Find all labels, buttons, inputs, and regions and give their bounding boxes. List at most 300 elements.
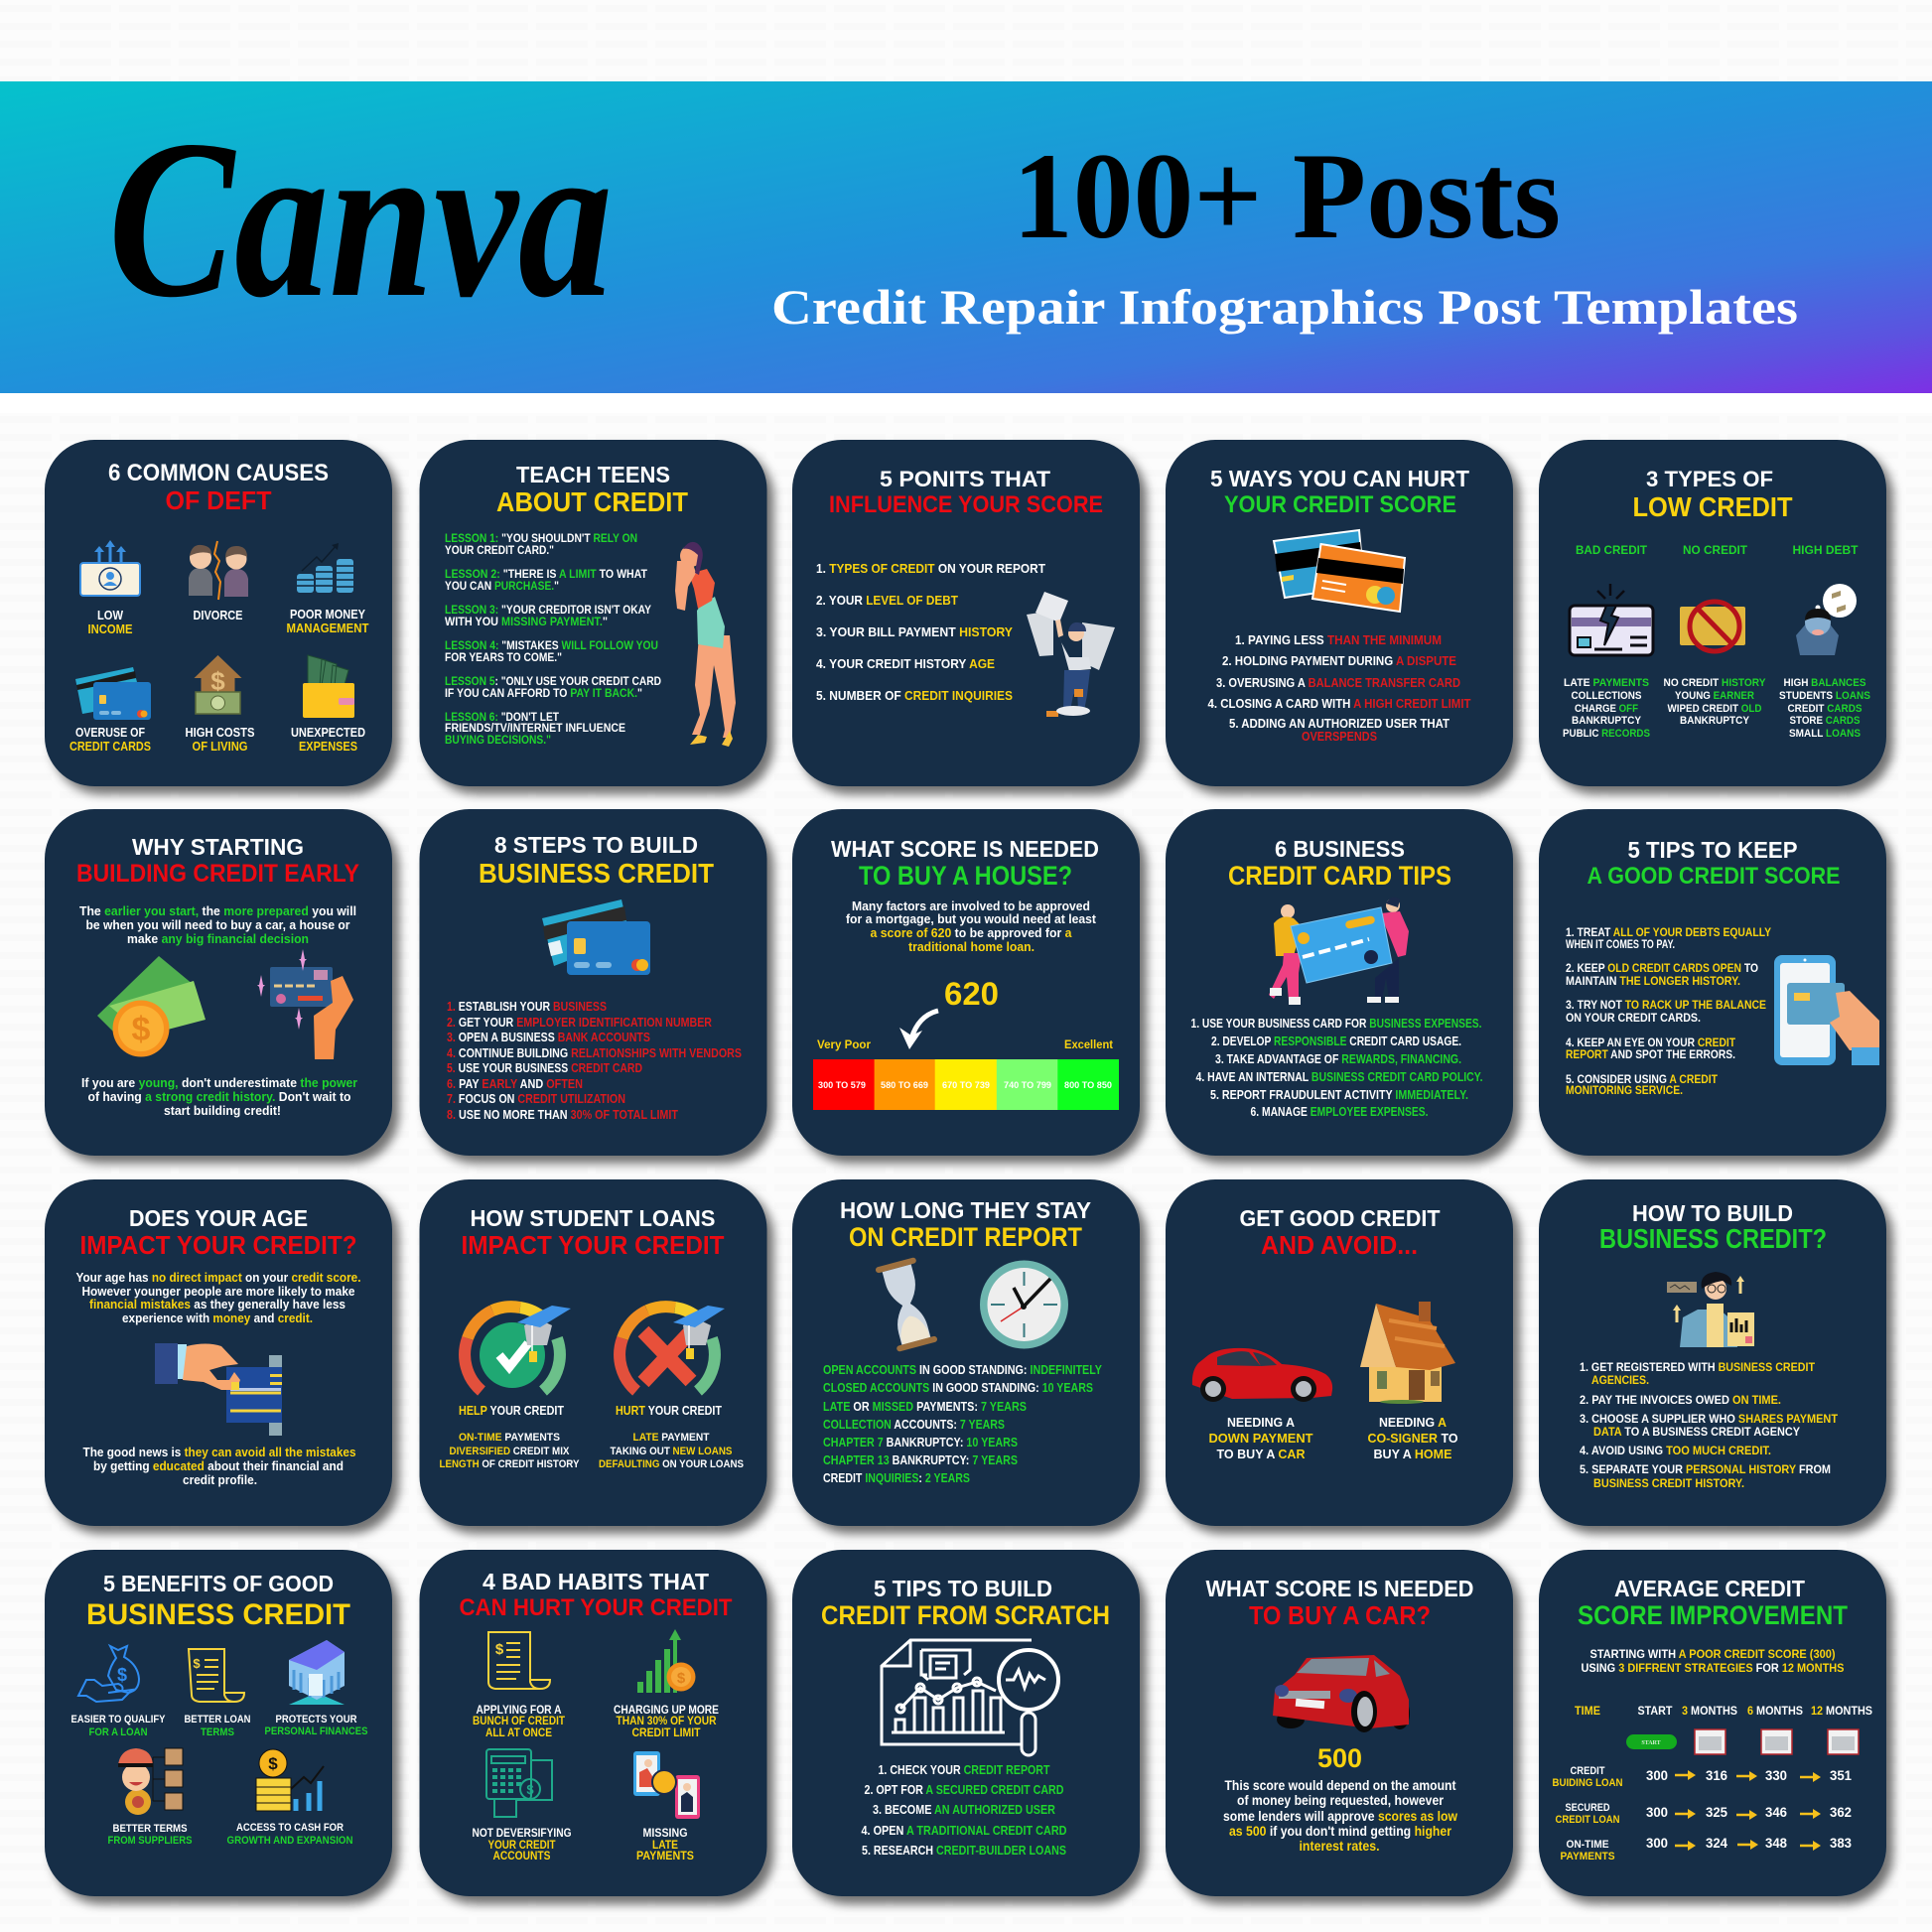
harmful habits list: OVERSPENDS <box>1302 730 1377 744</box>
icon: invoice: $ <box>495 1641 504 1658</box>
score values: 325 <box>1706 1804 1727 1820</box>
labels <box>1209 1415 1457 1461</box>
labels: NEEDING A <box>1227 1415 1296 1430</box>
labels row 2: HIGH COSTS <box>185 725 255 740</box>
closing text: credit profile. <box>183 1472 257 1487</box>
closing text <box>81 1075 357 1118</box>
heading: BUILDING CREDIT EARLY <box>76 860 359 888</box>
score values: 348 <box>1765 1835 1787 1851</box>
lessons text: FOR YEARS TO COME." <box>445 650 562 664</box>
heading <box>459 1569 733 1621</box>
description: as 500 if you don't mind getting higher <box>1229 1824 1452 1839</box>
heading <box>829 467 1103 518</box>
steps list: 1. GET REGISTERED WITH BUSINESS CREDIT <box>1580 1362 1815 1374</box>
column headers: BAD CREDIT <box>1576 543 1648 557</box>
lessons text: BUYING DECISIONS." <box>445 733 551 747</box>
description: This score would depend on the amount <box>1225 1778 1456 1793</box>
labels row 1: ALL AT ONCE <box>485 1727 552 1739</box>
illustration: worried woman <box>675 542 736 747</box>
icon: money bag in hand: $ <box>117 1665 127 1685</box>
scale labels: Excellent <box>1064 1037 1113 1051</box>
heading: HOW STUDENT LOANS <box>471 1205 715 1231</box>
panel: how long they stay on credit report <box>792 1179 1140 1526</box>
heading <box>479 832 714 889</box>
icon: rising chart with coin: $ <box>677 1670 686 1687</box>
heading <box>1587 837 1841 890</box>
steps list <box>447 1000 742 1122</box>
heading: 5 TIPS TO KEEP <box>1628 837 1797 863</box>
labels <box>459 1403 722 1418</box>
harmful habits list: 2. HOLDING PAYMENT DURING A DISPUTE <box>1222 654 1456 668</box>
table headers: TIME <box>1575 1706 1600 1718</box>
chart: credit score scale: 670 TO 739 <box>942 1080 990 1091</box>
factor lists: TAKING OUT NEW LOANS <box>610 1446 733 1457</box>
labels row 2 <box>69 725 365 754</box>
steps list: 6. PAY EARLY AND OFTEN <box>447 1077 583 1091</box>
illustration: man with papers <box>1027 592 1115 717</box>
heading: WHAT SCORE IS NEEDED <box>1205 1576 1473 1601</box>
table headers: 12 MONTHS <box>1811 1706 1872 1718</box>
heading: WHAT SCORE IS NEEDED <box>831 836 1099 862</box>
icon: overuse of credit cards <box>75 667 151 720</box>
lessons text: LESSON 5: "ONLY USE YOUR CREDIT CARD <box>445 674 661 688</box>
score values: 330 <box>1765 1767 1787 1783</box>
column lists <box>1563 677 1870 740</box>
labels row 2: NOT DEVERSIFYING <box>473 1828 572 1840</box>
description: However younger people are more likely to make <box>81 1284 355 1299</box>
heading <box>1228 836 1451 891</box>
heading <box>1239 1205 1440 1260</box>
heading: 6 COMMON CAUSES <box>108 460 329 486</box>
steps list: 4. CONTINUE BUILDING RELATIONSHIPS WITH VENDORS <box>447 1046 742 1060</box>
score factors list: 5. NUMBER OF CREDIT INQUIRIES <box>816 688 1013 703</box>
icon: calculator and documents: $ <box>526 1782 534 1797</box>
banner title: 100+ Posts <box>1013 128 1561 264</box>
panel: 5 tips to keep a good credit score <box>1539 809 1886 1156</box>
harmful habits list: 5. ADDING AN AUTHORIZED USER THAT <box>1229 717 1449 731</box>
steps list: 5. USE YOUR BUSINESS CREDIT CARD <box>447 1061 642 1075</box>
icon: low income <box>80 540 140 596</box>
tips list: 3. BECOME AN AUTHORIZED USER <box>873 1803 1055 1817</box>
heading: ABOUT CREDIT <box>496 486 688 517</box>
labels row 1: MANAGEMENT <box>286 621 369 635</box>
icon: money bag in hand <box>78 1646 139 1702</box>
factor lists: ON-TIME PAYMENTS <box>459 1432 560 1444</box>
score values: 316 <box>1706 1767 1727 1783</box>
labels: BUY A HOME <box>1374 1447 1452 1461</box>
tips list: 4. OPEN A TRADITIONAL CREDIT CARD <box>862 1824 1066 1838</box>
panel: 6 business credit card tips <box>1166 809 1513 1156</box>
lessons text: YOU CAN PURCHASE." <box>445 579 559 593</box>
heading <box>461 1205 725 1260</box>
panel: 5 points that influence your score <box>792 440 1140 786</box>
labels row 1: CHARGING UP MORE <box>614 1705 719 1717</box>
labels row 2: EXPENSES <box>299 739 357 754</box>
labels row 2: CREDIT CARDS <box>69 739 151 754</box>
icon: stressed person <box>1796 584 1857 655</box>
intro text: STARTING WITH A POOR CREDIT SCORE (300) <box>1590 1649 1836 1661</box>
icon: phones with coin <box>633 1751 700 1819</box>
lessons text: LESSON 3: "YOUR CREDITOR ISN'T OKAY <box>445 603 651 617</box>
icon: supplier worker <box>118 1748 183 1815</box>
row labels: CREDIT <box>1571 1765 1605 1777</box>
column headers: HIGH DEBT <box>1793 543 1859 557</box>
harmful habits list: 3. OVERUSING A BALANCE TRANSFER CARD <box>1216 676 1460 690</box>
panel: 6 common causes of debt <box>45 440 392 786</box>
labels row 2: LATE <box>652 1840 678 1852</box>
icon: bank <box>289 1640 345 1705</box>
heading <box>821 1576 1110 1630</box>
tips list: 1. TREAT ALL OF YOUR DEBTS EQUALLY <box>1566 927 1771 939</box>
heading: IMPACT YOUR CREDIT? <box>79 1230 357 1260</box>
chart: credit score scale: 740 TO 799 <box>1004 1080 1051 1091</box>
icon: invoice <box>189 1649 244 1702</box>
column headers: NO CREDIT <box>1683 543 1748 557</box>
tips list: 4. HAVE AN INTERNAL BUSINESS CREDIT CARD POLICY. <box>1195 1069 1483 1084</box>
column lists: BANKRUPTCY <box>1572 715 1642 727</box>
description: a score of 620 to be approved for a <box>870 925 1072 940</box>
icon: credit cards <box>1274 530 1405 612</box>
heading <box>108 460 329 515</box>
tips list: 5. RESEARCH CREDIT-BUILDER LOANS <box>862 1844 1066 1858</box>
description: for a mortgage, but you would need at least <box>846 911 1097 926</box>
logo: Canva: Canva <box>108 94 613 345</box>
labels row 1: PROTECTS YOUR <box>276 1714 357 1725</box>
icon: invoice: $ <box>193 1656 201 1671</box>
labels: CO-SIGNER TO <box>1368 1431 1457 1446</box>
description: financial mistakes as they generally have less <box>89 1297 345 1311</box>
heading: CREDIT CARD TIPS <box>1228 861 1451 891</box>
labels: HURT YOUR CREDIT <box>616 1403 722 1418</box>
score values <box>1646 1767 1852 1851</box>
score values: 300 <box>1646 1835 1668 1851</box>
heading <box>79 1205 357 1260</box>
labels row 1: CREDIT LIMIT <box>631 1727 701 1739</box>
score values: 362 <box>1830 1804 1852 1820</box>
icon: red car front view <box>1273 1655 1410 1732</box>
panel: get good credit and avoid <box>1166 1179 1513 1526</box>
description: interest rates. <box>1299 1839 1380 1854</box>
illustration: people holding card <box>1269 897 1409 1005</box>
labels row 1: TERMS <box>201 1726 234 1738</box>
lessons text: LESSON 6: "DON'T LET <box>445 710 560 724</box>
closing text <box>83 1445 355 1487</box>
tips list <box>1191 1016 1483 1119</box>
steps list: 5. SEPARATE YOUR PERSONAL HISTORY FROM <box>1580 1464 1831 1476</box>
heading: INFLUENCE YOUR SCORE <box>829 491 1103 518</box>
table headers: 3 MONTHS <box>1682 1706 1737 1718</box>
labels row 1: POOR MONEY <box>290 607 365 621</box>
score values: 300 <box>1646 1767 1668 1783</box>
tips list: 2. KEEP OLD CREDIT CARDS OPEN TO <box>1566 963 1758 975</box>
icon: cash and growth <box>256 1749 324 1811</box>
labels row 2: BETTER TERMS <box>113 1823 187 1835</box>
labels row 2: ACCOUNTS <box>492 1851 551 1863</box>
score factors list: 2. YOUR LEVEL OF DEBT <box>816 593 958 608</box>
description <box>1223 1778 1457 1854</box>
tips list: 5. CONSIDER USING A CREDIT <box>1566 1074 1718 1086</box>
arrow <box>899 1011 938 1049</box>
score values: 324 <box>1706 1835 1727 1851</box>
chart: credit score scale: 300 TO 579 <box>818 1080 866 1091</box>
labels row 1: APPLYING FOR A <box>477 1705 562 1717</box>
heading: HOW TO BUILD <box>1632 1200 1793 1226</box>
column lists: PUBLIC RECORDS <box>1563 728 1650 740</box>
labels row 1 <box>71 1714 367 1738</box>
heading: DOES YOUR AGE <box>129 1205 308 1231</box>
column lists: STUDENTS LOANS <box>1779 690 1870 702</box>
labels: HELP YOUR CREDIT <box>459 1403 564 1418</box>
steps list: AGENCIES. <box>1591 1375 1649 1387</box>
durations list: CHAPTER 7 BANKRUPTCY: 10 YEARS <box>823 1436 1018 1449</box>
description: Your age has no direct impact on your credit score. <box>75 1270 361 1285</box>
icon: high cost of living <box>195 655 242 714</box>
panel: why starting building credit early <box>45 809 392 1156</box>
intro text: USING 3 DIFFRENT STRATEGIES FOR 12 MONTHS <box>1581 1663 1845 1675</box>
durations list: LATE OR MISSED PAYMENTS: 7 YEARS <box>823 1400 1027 1414</box>
score values: 300 <box>1646 1804 1668 1820</box>
icons: calendars <box>1695 1729 1859 1754</box>
panel: score needed to buy a car <box>1166 1550 1513 1896</box>
heading: WHY STARTING <box>132 834 304 860</box>
closing text: The good news is they can avoid all the mistakes <box>83 1445 355 1459</box>
heading <box>840 1197 1091 1252</box>
score values: 346 <box>1765 1804 1787 1820</box>
column lists: STORE CARDS <box>1789 715 1861 727</box>
banner subtitle: Credit Repair Infographics Post Templates <box>771 279 1798 335</box>
closing text: If you are young, don't underestimate the power <box>81 1075 357 1090</box>
description <box>846 898 1097 954</box>
score value: 620 <box>944 976 999 1012</box>
heading: TO BUY A CAR? <box>1249 1600 1431 1630</box>
heading: SCORE IMPROVEMENT <box>1578 1600 1848 1630</box>
lessons text: FRIENDS/TV/INTERNET INFLUENCE <box>445 721 625 735</box>
steps list: 2. GET YOUR EMPLOYER IDENTIFICATION NUMBER <box>447 1016 712 1030</box>
score values: 351 <box>1830 1767 1852 1783</box>
icon: divorce <box>189 541 248 600</box>
icon: red car <box>1192 1348 1332 1402</box>
heading <box>86 1571 350 1631</box>
heading <box>1205 1576 1473 1630</box>
icon: money and coin: $ <box>132 1011 151 1048</box>
factor lists: LATE PAYMENT <box>633 1432 710 1444</box>
description: of money being requested, however <box>1237 1793 1445 1808</box>
labels row 1: EASIER TO QUALIFY <box>71 1714 166 1725</box>
heading: A GOOD CREDIT SCORE <box>1587 863 1841 890</box>
icon: money and coin <box>97 956 206 1056</box>
description <box>75 1270 361 1325</box>
row labels: CREDIT LOAN <box>1555 1814 1620 1826</box>
icon: report with magnifier <box>882 1640 1058 1755</box>
score factors list <box>816 561 1045 703</box>
heading: CAN HURT YOUR CREDIT <box>459 1594 733 1621</box>
labels row 2: PAYMENTS <box>636 1851 694 1863</box>
harmful habits list: 4. CLOSING A CARD WITH A HIGH CREDIT LIMIT <box>1207 697 1471 711</box>
labels: NEEDING A <box>1379 1415 1448 1430</box>
heading: 3 TYPES OF <box>1646 467 1773 491</box>
icon: hand holding card <box>257 949 353 1059</box>
scale labels <box>817 1037 1113 1051</box>
labels row 2: YOUR CREDIT <box>488 1840 556 1852</box>
icon: house <box>1360 1302 1455 1404</box>
start button <box>1626 1734 1677 1749</box>
labels row 2: ACCESS TO CASH FOR <box>236 1822 344 1834</box>
steps list: 4. AVOID USING TOO MUCH CREDIT. <box>1580 1446 1771 1457</box>
row labels <box>1553 1765 1623 1863</box>
icon: high cost of living: $ <box>210 666 225 696</box>
panel: how to build business credit <box>1539 1179 1886 1526</box>
column lists: YOUNG EARNER <box>1675 690 1754 702</box>
labels row 2: GROWTH AND EXPANSION <box>226 1835 353 1847</box>
heading <box>496 462 688 517</box>
heading: 5 WAYS YOU CAN HURT <box>1210 466 1469 491</box>
column lists: COLLECTIONS <box>1571 690 1642 702</box>
panel: how student loans impact your credit <box>419 1179 766 1526</box>
panel: average credit score improvement <box>1539 1550 1886 1896</box>
row labels: BUIDING LOAN <box>1553 1777 1623 1789</box>
labels row 1: PERSONAL FINANCES <box>264 1725 367 1737</box>
tips list: ON YOUR CREDIT CARDS. <box>1566 1013 1701 1025</box>
banner <box>0 81 1932 393</box>
heading: BUSINESS CREDIT? <box>1599 1223 1827 1254</box>
icon: cash and growth: $ <box>268 1754 278 1773</box>
heading: 4 BAD HABITS THAT <box>483 1569 709 1594</box>
tips list: 1. USE YOUR BUSINESS CARD FOR BUSINESS EXPENSES. <box>1191 1016 1481 1031</box>
labels row 1: INCOME <box>87 621 133 636</box>
intro text: make any big financial decision <box>127 931 309 946</box>
tips list: 2. OPT FOR A SECURED CREDIT CARD <box>864 1783 1064 1797</box>
column lists: CHARGE OFF <box>1575 703 1638 715</box>
durations list: COLLECTION ACCOUNTS: 7 YEARS <box>823 1418 1005 1432</box>
tips list: 5. REPORT FRAUDULENT ACTIVITY IMMEDIATELY. <box>1210 1087 1468 1102</box>
panel: teach teens about credit <box>419 440 766 786</box>
table headers <box>1575 1706 1872 1718</box>
heading: 6 BUSINESS <box>1275 836 1405 862</box>
lessons text: WITH YOU MISSING PAYMENT." <box>445 615 608 628</box>
tips list <box>1566 927 1771 1097</box>
column lists: LATE PAYMENTS <box>1564 677 1649 689</box>
column lists: HIGH BALANCES <box>1783 677 1866 689</box>
panel: 5 tips to build credit from scratch <box>792 1550 1140 1896</box>
labels row 1 <box>473 1705 719 1739</box>
heading: 5 TIPS TO BUILD <box>874 1576 1052 1601</box>
heading: TO BUY A HOUSE? <box>859 861 1072 891</box>
tips list: 2. DEVELOP RESPONSIBLE CREDIT CARD USAGE. <box>1211 1034 1461 1048</box>
row labels: ON-TIME <box>1567 1839 1608 1851</box>
arrows <box>1675 1770 1821 1851</box>
tips list: WHEN IT COMES TO PAY. <box>1566 939 1675 951</box>
closing text: start building credit! <box>164 1103 281 1118</box>
factor lists: LENGTH OF CREDIT HISTORY <box>439 1458 580 1470</box>
lessons text: IF YOU CAN AFFORD TO PAY IT BACK." <box>445 686 642 700</box>
heading: 5 PONITS THAT <box>880 467 1050 491</box>
icon: clock <box>980 1261 1068 1348</box>
heading: OF DEFT <box>165 485 272 515</box>
steps list: 8. USE NO MORE THAN 30% OF TOTAL LIMIT <box>447 1108 678 1122</box>
heading: TEACH TEENS <box>516 462 670 487</box>
heading: IMPACT YOUR CREDIT <box>461 1230 725 1260</box>
steps list: 3. CHOOSE A SUPPLIER WHO SHARES PAYMENT <box>1580 1414 1838 1426</box>
durations list <box>823 1363 1103 1485</box>
panel: score needed to buy a house <box>792 809 1140 1156</box>
description: some lenders will approve scores as low <box>1223 1809 1457 1824</box>
labels row 2 <box>473 1828 694 1863</box>
tips list: 3. TRY NOT TO RACK UP THE BALANCE <box>1566 1000 1766 1012</box>
heading: BUSINESS CREDIT <box>86 1598 350 1631</box>
icon: help gauge <box>465 1306 571 1391</box>
heading <box>76 834 359 888</box>
heading <box>1578 1576 1848 1630</box>
illustration: phone with card and hand <box>1774 955 1879 1065</box>
icon: calculator and documents <box>486 1749 552 1817</box>
heading: CREDIT FROM SCRATCH <box>821 1600 1110 1630</box>
panel: 4 bad habits <box>419 1550 766 1896</box>
heading: YOUR CREDIT SCORE <box>1224 491 1456 518</box>
lessons text: LESSON 2: "THERE IS A LIMIT TO WHAT <box>445 567 648 581</box>
lessons text: YOUR CREDIT CARD." <box>445 543 554 557</box>
closing text: of having a strong credit history. Don't wait to <box>87 1089 351 1104</box>
heading: ON CREDIT REPORT <box>849 1222 1082 1252</box>
heading: AVERAGE CREDIT <box>1614 1576 1805 1601</box>
labels: DOWN PAYMENT <box>1209 1431 1313 1446</box>
labels row 2: OVERUSE OF <box>75 725 145 740</box>
icon: poor money management <box>297 543 353 593</box>
closing text: by getting educated about their financial and <box>93 1458 344 1473</box>
tips list <box>862 1763 1066 1858</box>
table headers: START <box>1638 1706 1672 1718</box>
chart: credit score scale: 580 TO 669 <box>881 1080 928 1091</box>
chart: credit score scale: 800 TO 850 <box>1064 1080 1112 1091</box>
column lists: BANKRUPTCY <box>1680 715 1750 727</box>
steps list: 3. OPEN A BUSINESS BANK ACCOUNTS <box>447 1031 650 1044</box>
tips list: 6. MANAGE EMPLOYEE EXPENSES. <box>1251 1104 1428 1119</box>
heading: HOW LONG THEY STAY <box>840 1197 1091 1223</box>
illustration: analyst with chart <box>1667 1272 1754 1347</box>
durations list: CREDIT INQUIRIES: 2 YEARS <box>823 1471 970 1485</box>
heading <box>1210 466 1469 518</box>
column lists: NO CREDIT HISTORY <box>1664 677 1766 689</box>
heading: AND AVOID... <box>1261 1230 1418 1260</box>
heading <box>1632 467 1793 522</box>
tips list: MAINTAIN THE LONGER HISTORY. <box>1566 976 1740 988</box>
table headers: 6 MONTHS <box>1747 1706 1803 1718</box>
tips list: 4. KEEP AN EYE ON YOUR CREDIT <box>1566 1037 1735 1049</box>
chart: credit score scale <box>813 1059 1119 1110</box>
heading: LOW CREDIT <box>1632 491 1793 522</box>
intro text: The earlier you start, the more prepared you will <box>79 903 356 918</box>
steps list: DATA TO A BUSINESS CREDIT AGENCY <box>1593 1427 1800 1439</box>
tips list: REPORT AND SPOT THE ERRORS. <box>1566 1049 1735 1061</box>
panel: 5 ways you can hurt your credit score <box>1166 440 1513 786</box>
steps list: BUSINESS CREDIT HISTORY. <box>1593 1478 1744 1490</box>
durations list: OPEN ACCOUNTS IN GOOD STANDING: INDEFINITELY <box>823 1363 1103 1377</box>
heading: 8 STEPS TO BUILD <box>494 832 698 858</box>
harmful habits list <box>1207 633 1471 744</box>
score factors list: 3. YOUR BILL PAYMENT HISTORY <box>816 624 1013 639</box>
tips list: 3. TAKE ADVANTAGE OF REWARDS, FINANCING. <box>1215 1051 1461 1066</box>
heading: 5 BENEFITS OF GOOD <box>103 1571 334 1596</box>
labels row 1: BETTER LOAN <box>185 1714 251 1725</box>
labels row 1: FOR A LOAN <box>89 1726 148 1738</box>
score values: 383 <box>1830 1835 1852 1851</box>
factor lists <box>439 1432 744 1470</box>
lessons text: LESSON 1: "YOU SHOULDN'T RELY ON <box>445 531 637 545</box>
intro text <box>1581 1649 1845 1675</box>
icon: invoice <box>488 1632 550 1689</box>
labels row 2: UNEXPECTED <box>291 725 365 740</box>
labels row 1 <box>87 607 369 636</box>
icon: hourglass <box>875 1257 938 1352</box>
